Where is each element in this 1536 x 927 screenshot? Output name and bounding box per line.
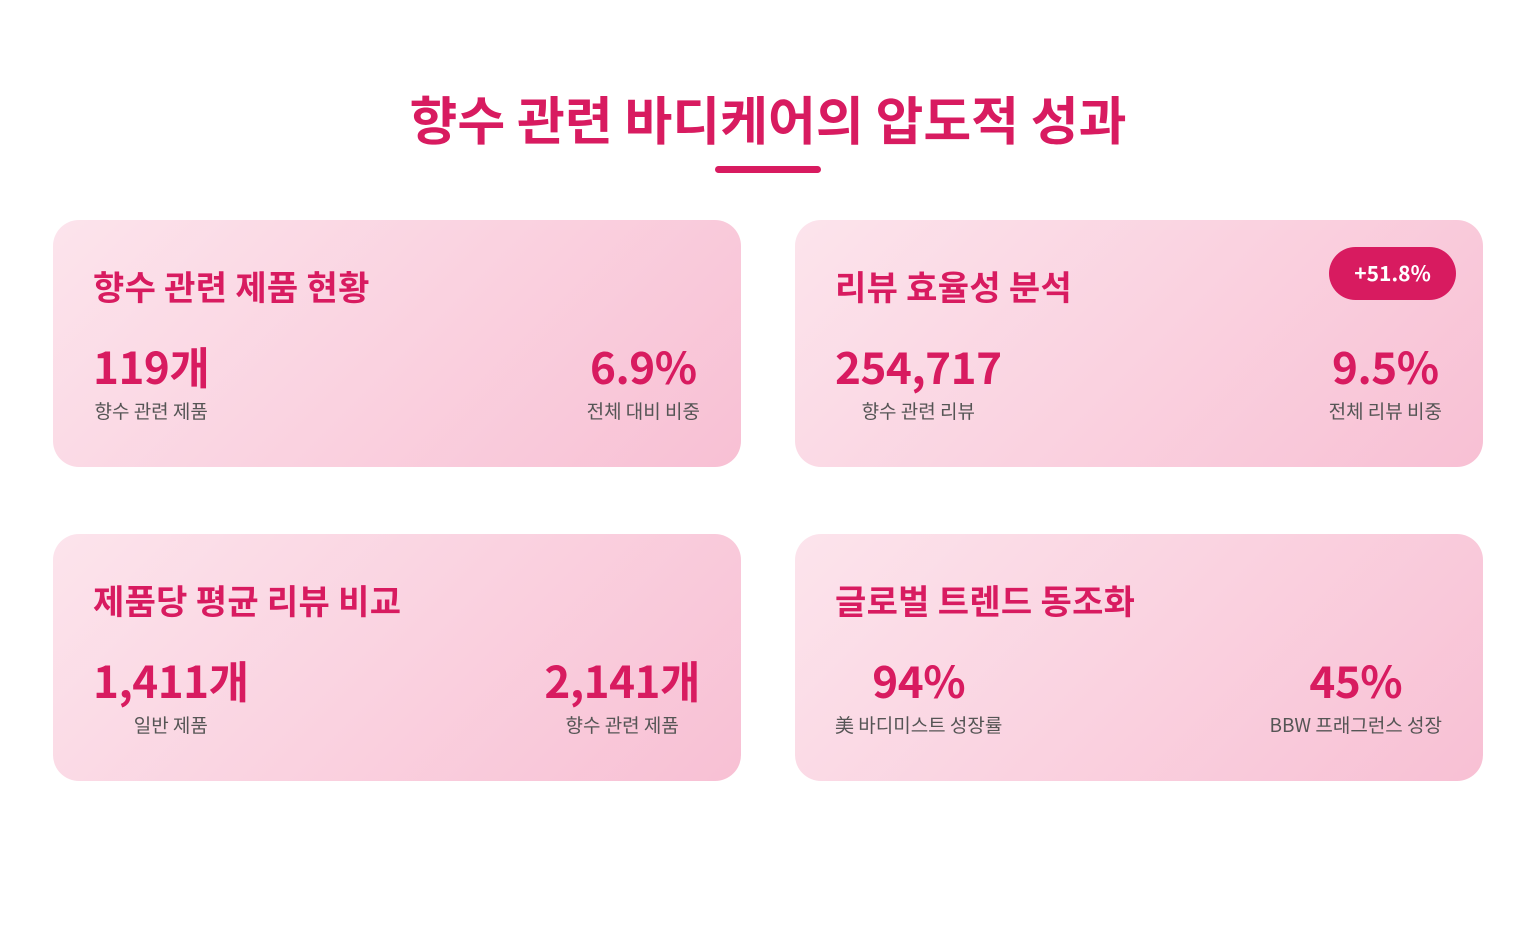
stat: 6.9%: 전체 대비 비중 xyxy=(587,397,700,424)
panel: avg reviews xyxy=(53,534,741,781)
panel: global trend xyxy=(795,534,1483,781)
stat: 45%: 45% xyxy=(1309,647,1402,711)
panel heading: 향수 관련 제품 현황 xyxy=(93,261,370,310)
stat: 9.5%: 전체 리뷰 비중 xyxy=(1329,397,1442,424)
title: 향수 관련 바디케어의 압도적 성과 xyxy=(410,80,1126,155)
stat: 94%: 美 바디미스트 성장률 xyxy=(835,711,1002,738)
stat: 1,411: 1,411개 xyxy=(93,647,249,711)
panel heading: 글로벌 트렌드 동조화 xyxy=(835,575,1135,624)
panel heading: 리뷰 효율성 분석 xyxy=(835,261,1072,310)
stat: 254,717: 254,717 xyxy=(835,333,1002,397)
stat: 1,411: 일반 제품 xyxy=(134,711,208,738)
stat: 6.9%: 6.9% xyxy=(590,333,697,397)
stat: 9.5%: 9.5% xyxy=(1332,333,1439,397)
stat: 45%: BBW 프래그런스 성장 xyxy=(1270,711,1442,738)
stat: 2,141: 2,141개 xyxy=(544,647,700,711)
stat: 45% xyxy=(1270,647,1442,738)
badge xyxy=(1329,247,1456,300)
stat: 119: 119개 xyxy=(93,333,209,397)
stat: 119: 향수 관련 제품 xyxy=(94,397,208,424)
stat: 94% xyxy=(835,647,1002,738)
stat: 2,141: 향수 관련 제품 xyxy=(565,711,679,738)
stat: 9.5% xyxy=(1329,333,1442,424)
badge: +51.8% xyxy=(1354,258,1431,288)
panel: review efficiency xyxy=(795,220,1483,467)
panel heading: 제품당 평균 리뷰 비교 xyxy=(93,575,401,624)
stat: 94%: 94% xyxy=(872,647,965,711)
panel: product status xyxy=(53,220,741,467)
stat: 254,717: 향수 관련 리뷰 xyxy=(862,397,975,424)
stat: 6.9% xyxy=(587,333,700,424)
